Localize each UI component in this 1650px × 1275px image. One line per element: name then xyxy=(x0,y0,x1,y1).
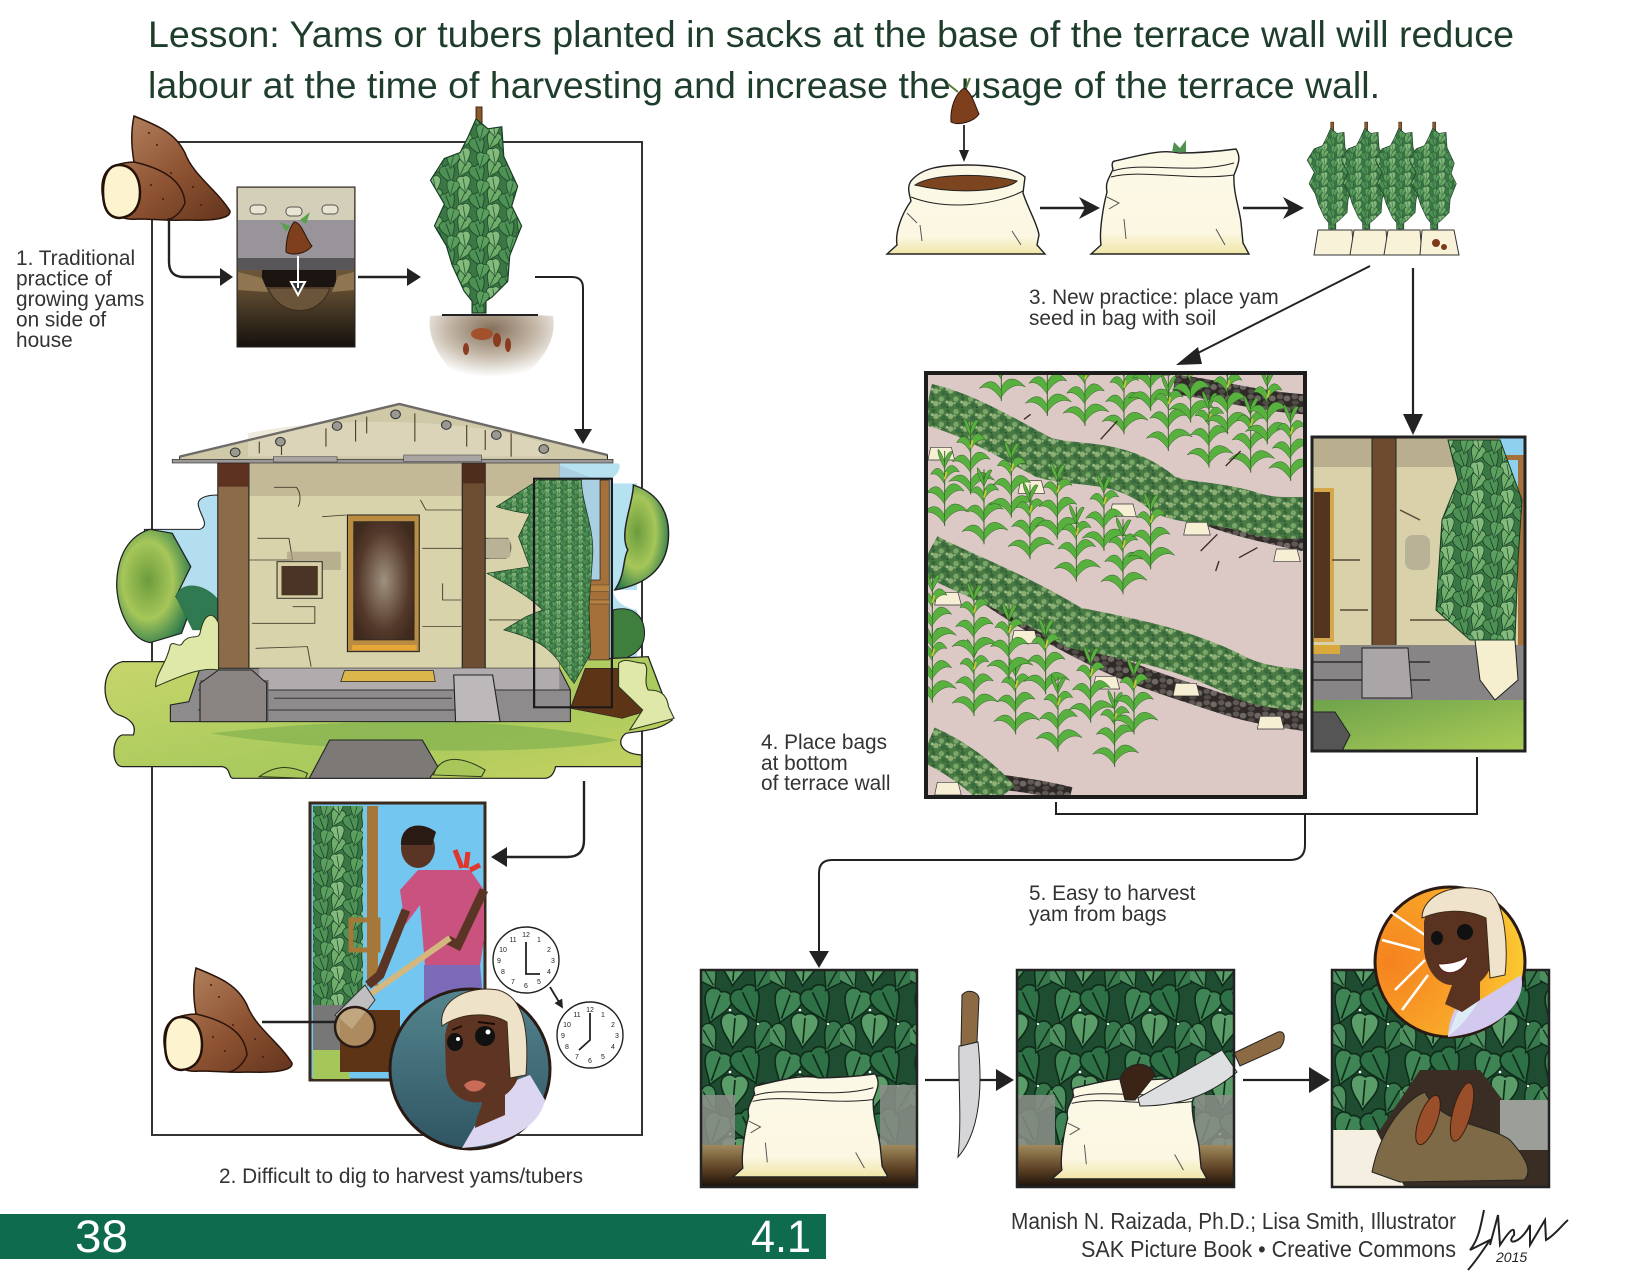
eave xyxy=(172,459,613,463)
wall stones xyxy=(1174,384,1304,404)
arrow: plants to house wall xyxy=(1403,268,1423,435)
arrow: grown plant to house xyxy=(535,277,592,444)
window xyxy=(277,562,322,598)
line: yam to lens on dig spot xyxy=(262,1007,375,1047)
text: step 5: yam from bags xyxy=(1029,903,1167,926)
sky behind house xyxy=(144,495,219,613)
panel: cutting bag open xyxy=(1017,970,1284,1187)
footer bar xyxy=(0,1211,826,1262)
footer bar: 38 xyxy=(75,1211,128,1262)
illustration: house with vine xyxy=(105,404,674,778)
signature: 2015 xyxy=(1495,1249,1527,1265)
icon: sad farmer portrait xyxy=(390,989,550,1149)
icon: open bag with soil xyxy=(887,165,1045,254)
soil and path xyxy=(570,668,644,718)
left post xyxy=(218,463,249,672)
arrow: open bag to closed bag xyxy=(1040,197,1100,219)
door xyxy=(347,515,419,652)
text: step 1: 1. Traditional xyxy=(16,247,135,270)
text: step 5 xyxy=(1029,882,1196,926)
text: step 1: growing yams xyxy=(16,288,144,311)
panel: bag with foliage before cutting xyxy=(701,970,917,1187)
text: step 4: 4. Place bags xyxy=(761,731,887,754)
arrow: plants to terrace xyxy=(1176,266,1370,365)
vine xyxy=(487,480,593,683)
icon: closed bag xyxy=(1091,140,1249,254)
credits xyxy=(1011,1208,1456,1262)
panel: harvested yams from opened bag xyxy=(1332,970,1549,1187)
wall xyxy=(249,463,559,669)
text: step 4: at bottom xyxy=(761,752,848,775)
arrow: seed into bag xyxy=(959,125,969,162)
icon: seed above bag xyxy=(948,78,979,124)
left tree xyxy=(117,529,191,643)
icon: yam top left xyxy=(102,116,230,220)
panel: bag of yam beside house wall xyxy=(1312,437,1525,751)
signature xyxy=(1468,1210,1568,1270)
panel: woman digging with hoe xyxy=(310,803,486,1080)
icon: yam vine on stake with tubers xyxy=(430,107,554,388)
title xyxy=(148,14,1514,106)
grass xyxy=(105,657,672,778)
highlight box xyxy=(534,479,612,707)
credits: Manish N. Raizada, Ph.D.; Lisa Smith, Illustrator xyxy=(1011,1208,1456,1234)
icon: row of four bagged yam plants xyxy=(1307,122,1459,255)
icon: clock start xyxy=(493,927,559,993)
panel: planting seed in soil by the wall xyxy=(237,187,355,347)
arrow: house to harvest panel xyxy=(491,781,584,867)
text: step 3: seed in bag with soil xyxy=(1029,307,1216,330)
arrow: cutting panel to harvest panel xyxy=(1243,1067,1330,1093)
title: Lesson: Yams or tubers planted in sacks at the base of the terrace wall will reduce xyxy=(148,14,1514,55)
right post xyxy=(462,463,485,677)
arrow: connector from terrace and wall to harvest xyxy=(809,757,1477,968)
text: step 4: of terrace wall xyxy=(761,772,890,795)
gable xyxy=(180,404,607,460)
icon: happy farmer portrait xyxy=(1375,887,1525,1037)
hedges xyxy=(927,404,1304,518)
text: step 1: practice of xyxy=(16,268,112,290)
panel: terrace wall with bags and maize xyxy=(924,371,1307,799)
porch and steps xyxy=(170,668,570,722)
title: labour at the time of harvesting and increase the usage of the terrace wall. xyxy=(148,65,1380,106)
arrow: planting to grown plant xyxy=(358,268,421,286)
text: step 1 xyxy=(16,247,144,352)
text: step 2: 2. Difficult to dig to harvest yams/tubers xyxy=(219,1165,583,1188)
shrubs xyxy=(156,615,674,778)
text: step 1: house xyxy=(16,329,73,352)
arrow: yam to planting panel xyxy=(169,218,233,286)
text: step 4 xyxy=(761,731,890,795)
icon: yam lower left xyxy=(164,968,292,1072)
credits: SAK Picture Book • Creative Commons xyxy=(1081,1236,1456,1262)
right tree xyxy=(615,485,669,590)
arrow: closed bag to plants xyxy=(1243,197,1304,219)
icon: knife xyxy=(958,991,980,1157)
text: step 3 xyxy=(1029,286,1279,330)
arrow: first panel to knife xyxy=(925,1069,1014,1091)
arrow: clock to clock xyxy=(550,987,562,1007)
text: step 1: on side of xyxy=(16,308,106,332)
side door frame xyxy=(559,465,609,660)
footer bar: 4.1 xyxy=(751,1211,811,1262)
icon: clock later xyxy=(557,1002,623,1068)
frame: traditional practice outline xyxy=(152,142,642,1135)
text: step 5: 5. Easy to harvest xyxy=(1029,882,1196,905)
text: step 3: 3. New practice: place yam xyxy=(1029,286,1279,309)
